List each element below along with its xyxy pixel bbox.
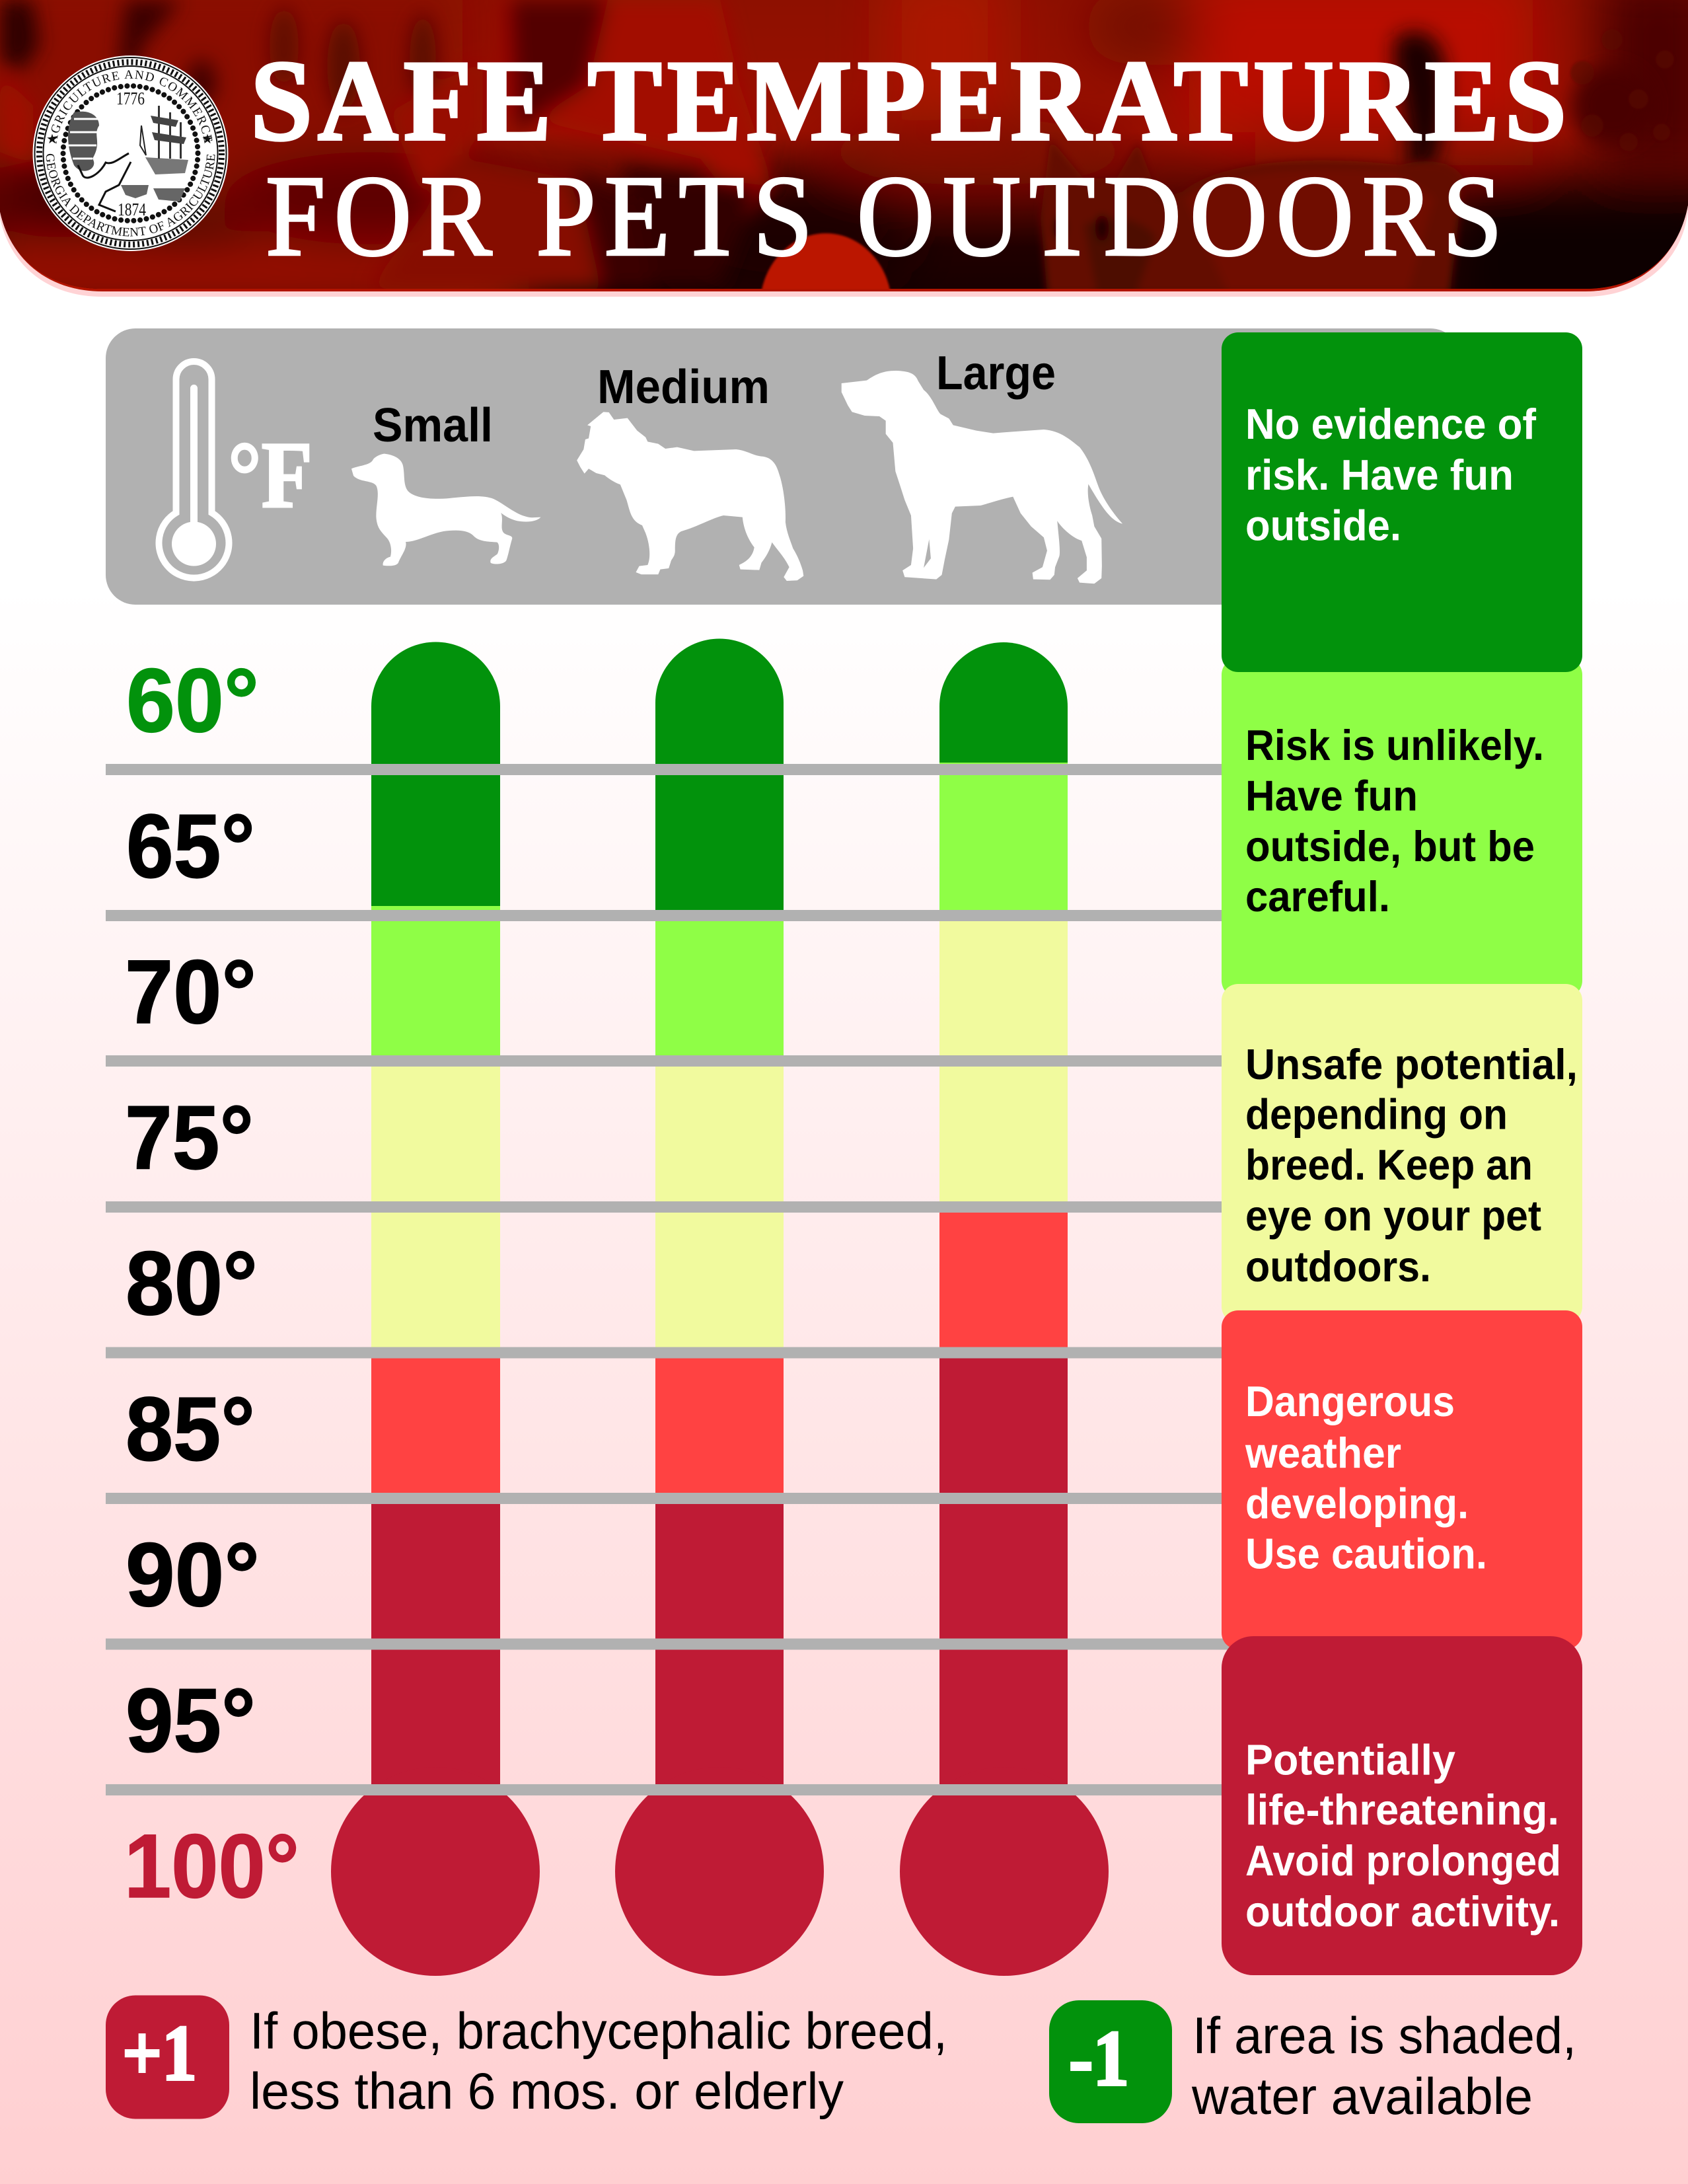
card text: Avoid prolonged [1245,1836,1561,1885]
header panel: size columns [106,328,1460,605]
card text: developing. [1245,1479,1469,1528]
thermometer column: large dogs [900,642,1109,1976]
thermometer column: small dogs [331,642,540,1976]
legend card: no evidence of risk [1222,332,1582,672]
card text: depending on [1245,1090,1508,1139]
panel background [106,328,1460,605]
card text: Use caution. [1245,1529,1487,1578]
card text [1245,1735,1561,1936]
modifier text -1 [1191,2006,1576,2125]
60 degrees: 60° [126,650,259,751]
seal year 1874: 1874 [118,200,146,219]
85 degrees: 85° [126,1378,255,1480]
card text: life-threatening. [1245,1786,1559,1834]
seal scene: ship [140,106,188,174]
icon: small dog silhouette [351,454,541,566]
80 degrees: 80° [126,1233,258,1334]
label: Large: Large [936,347,1056,400]
title line 2: FOR PETS OUTDOORS [266,152,1511,280]
95 degrees: 95° [126,1671,256,1771]
banner base [0,0,1688,291]
modifier text +1: If obese, brachycephalic breed, [250,2002,947,2060]
seal lettering top: AGRICULTURE AND COMMERCE [49,70,213,144]
seal stars: ★ [202,132,213,147]
seal year 1776: 1776 [116,89,145,108]
65 degrees: 65° [126,796,255,897]
badge -1 [1049,2000,1172,2123]
title line 1: SAFE TEMPERATURES [250,36,1572,165]
100 degrees: 100° [124,1816,299,1917]
modifier: plus one [106,1996,947,2120]
card text: eye on your pet [1245,1191,1541,1240]
card text: No evidence of [1245,400,1536,448]
legend card: life-threatening [1222,1636,1582,1975]
banner outline [0,132,1688,297]
temperature scale labels [124,650,299,1917]
card text [1245,400,1536,550]
seal scene: boat and bale [121,185,185,202]
card text: breed. Keep an [1245,1141,1533,1189]
degrees Fahrenheit label: °F [228,423,312,528]
card text [1245,1040,1578,1291]
card text: Dangerous [1245,1377,1455,1425]
card text: outside, but be [1245,822,1535,870]
icon: large dog silhouette [842,371,1122,584]
card text: outdoors. [1245,1242,1431,1291]
modifier text +1: less than 6 mos. or elderly [250,2062,844,2120]
seal: Georgia Department of Agriculture [33,56,229,251]
card text: Risk is unlikely. [1245,721,1544,769]
banner photo: dog and cat in red duotone [0,0,1688,289]
seal stars: ★ [46,132,58,147]
card text: weather [1245,1429,1401,1477]
label: Medium: Medium [597,361,770,414]
seal scene: tree and coast [68,112,131,211]
card text: Have fun [1245,772,1418,819]
70 degrees: 70° [125,942,256,1043]
modifier text -1: water available [1191,2067,1533,2125]
card text: risk. Have fun [1245,451,1514,499]
label: Small: Small [373,399,493,452]
75 degrees: 75° [125,1088,254,1188]
legend card: dangerous weather [1222,1310,1582,1649]
legend card: risk unlikely [1222,658,1582,997]
card text [1245,721,1544,921]
legend card: unsafe potential [1222,984,1582,1323]
icon: medium dog silhouette [577,412,803,581]
card text: Potentially [1245,1735,1455,1784]
modifier: minus one [1049,2000,1576,2125]
modifier text +1 [250,2002,947,2120]
icon: thermometer [159,361,229,578]
card text [1245,1377,1487,1578]
card text: outdoor activity. [1245,1887,1560,1936]
90 degrees: 90° [126,1525,260,1626]
badge +1 [106,1996,229,2119]
header banner [0,0,1688,297]
modifier text -1: If area is shaded, [1193,2006,1576,2064]
badge +1: +1 [122,2009,197,2097]
thermometer column: medium dogs [615,638,824,1976]
card text: Unsafe potential, [1245,1040,1578,1088]
card text: careful. [1245,872,1390,921]
seal lettering bottom: GEORGIA DEPARTMENT OF AGRICULTURE [46,153,215,237]
badge -1: -1 [1069,2014,1129,2102]
card text: outside. [1245,501,1401,550]
